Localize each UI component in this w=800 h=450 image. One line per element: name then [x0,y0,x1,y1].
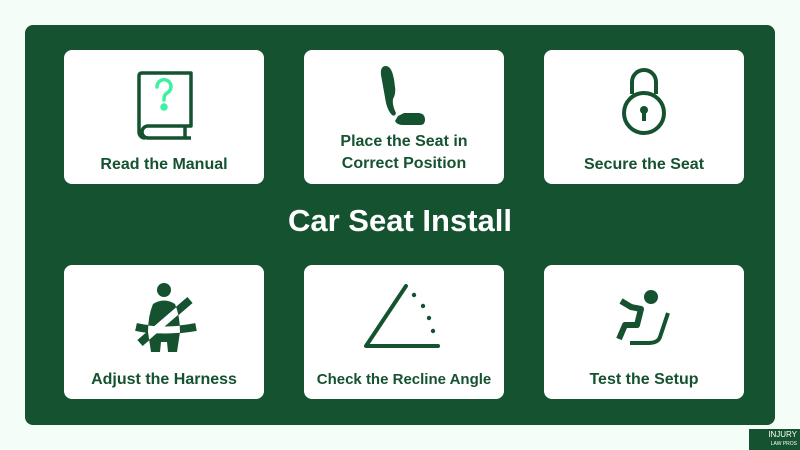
label: Secure the Seat [584,156,704,173]
card: place seat [304,50,504,184]
label: Adjust the Harness [91,371,237,388]
icon: angle [364,284,440,348]
label: Read the Manual [100,156,228,173]
logo: INJURY [768,430,797,439]
label: Correct Position [342,155,466,172]
icon: seat [380,66,425,125]
logo: LAW PROS [771,441,797,447]
icon: harness [135,283,197,352]
card: recline [304,265,504,399]
icon: book [137,71,193,140]
card: secure [544,50,744,184]
label: Test the Setup [589,371,699,388]
label: Check the Recline Angle [317,371,491,388]
label: Place the Seat in [340,133,468,150]
icon: lock [622,68,666,135]
card: harness [64,265,264,399]
logo [749,429,800,450]
card: test [544,265,744,399]
icon: test setup [616,290,670,345]
title: Car Seat Install [288,203,512,238]
label [340,133,468,172]
card: read manual [64,50,264,184]
